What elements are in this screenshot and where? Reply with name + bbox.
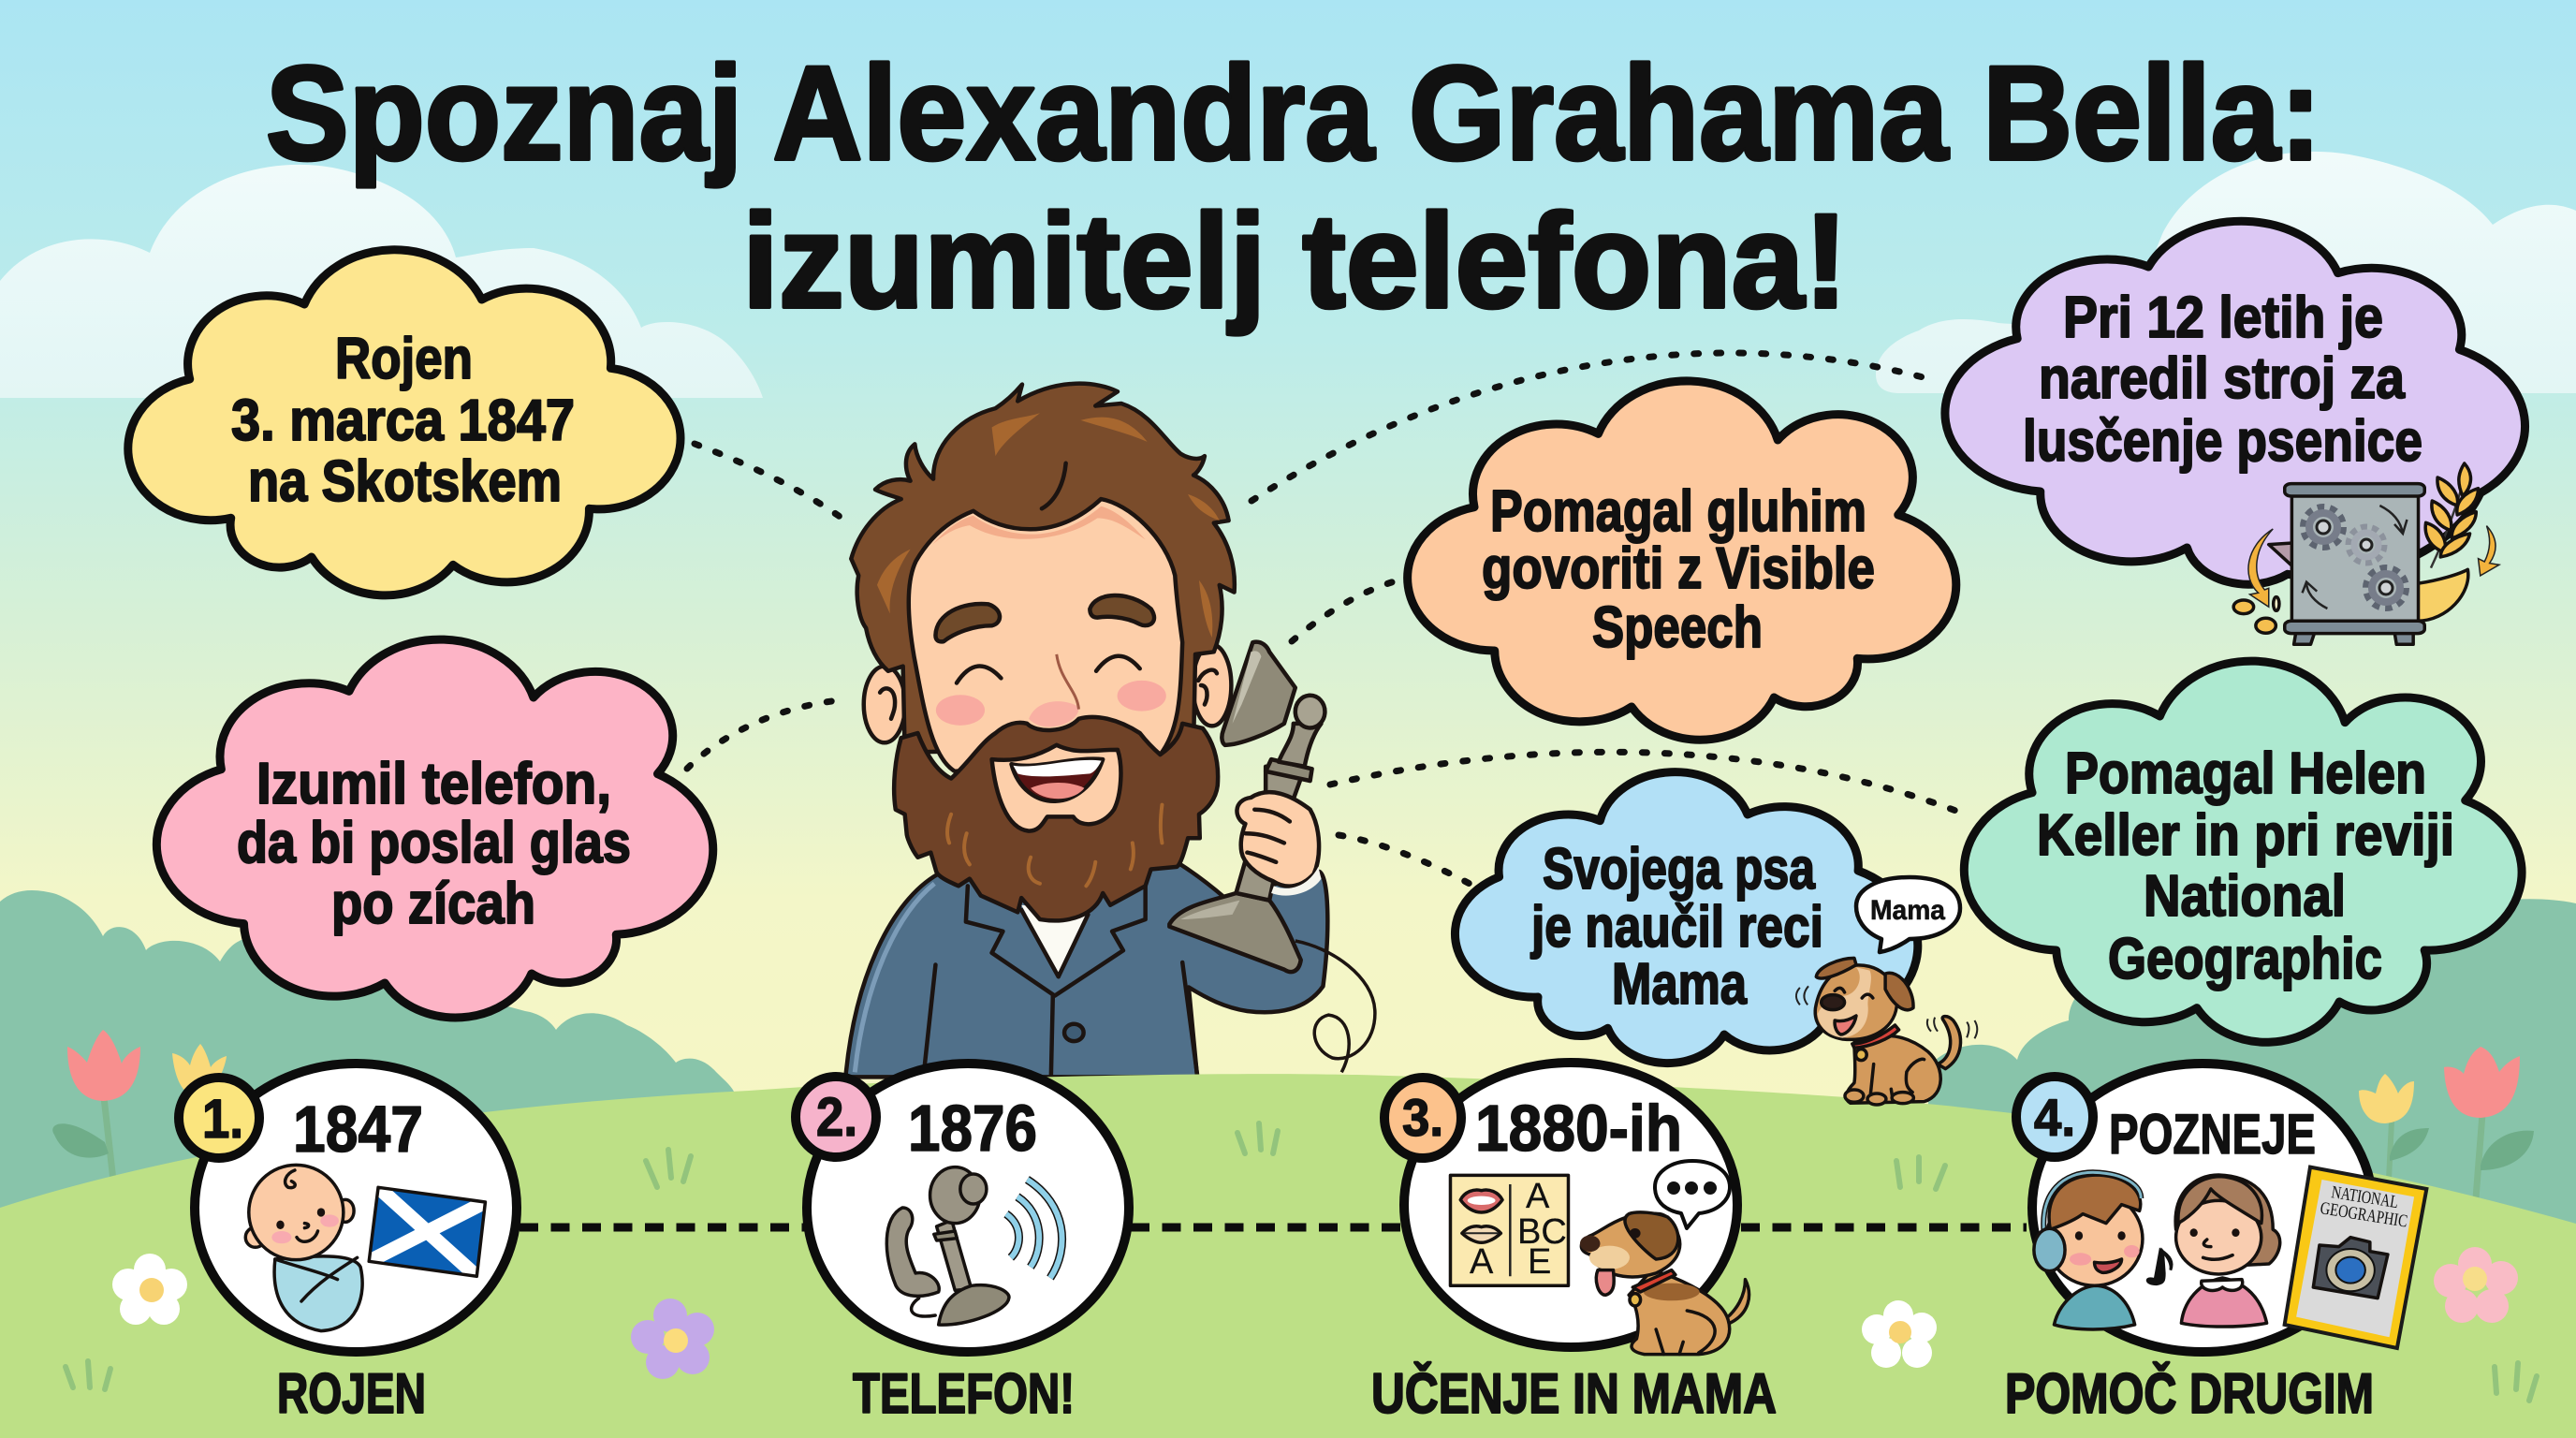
boy head: [2046, 1192, 2143, 1285]
girl face: [2176, 1200, 2261, 1274]
white flower right: [1862, 1300, 1937, 1368]
step labels: TELEFON!: [853, 1362, 1075, 1425]
text: National: [2144, 864, 2346, 929]
machine body: [2291, 494, 2419, 623]
tag: [1630, 1294, 1641, 1306]
open lips: [1460, 1190, 1502, 1212]
text: [237, 752, 631, 936]
body: [1846, 1035, 1940, 1103]
boy cheeks: [2070, 1245, 2140, 1266]
hair: [851, 384, 1235, 752]
year: 1880-ih: [1475, 1092, 1682, 1165]
telephone base highlight: [1180, 901, 1239, 919]
eyes: [276, 1208, 325, 1229]
icon: husking machine and wheat: [2233, 463, 2499, 644]
tongue: [1031, 783, 1084, 799]
tag: [1856, 1049, 1866, 1061]
icon: candlestick telephone with sound waves: [886, 1167, 1062, 1325]
text: Mama: [1612, 952, 1747, 1017]
gold arrows: [2248, 526, 2499, 607]
head: [1815, 965, 1897, 1039]
icon: gears: [2305, 508, 2405, 607]
panel: green cloud, helped others: [1964, 661, 2522, 1042]
step 4: later: [2016, 1064, 2426, 1352]
telephone cord: [1295, 941, 1375, 1072]
panel: orange cloud, Visible Speech: [1408, 381, 1956, 740]
cheeks: [271, 1214, 339, 1243]
speech bubble Mama: Mama: [1870, 895, 1945, 926]
mouth and tongue: [1835, 1016, 1856, 1034]
heading: POZNEJE: [2109, 1103, 2316, 1166]
teeth: [1013, 760, 1102, 776]
music note: [2147, 1250, 2172, 1284]
step labels: POMOČ DRUGIM: [2005, 1362, 2374, 1425]
girl dress: [2181, 1278, 2267, 1327]
step labels: ROJEN: [277, 1362, 426, 1425]
badge 4: [2016, 1077, 2093, 1157]
magazine title: NATIONAL: [2330, 1182, 2400, 1212]
chart card: [1450, 1175, 1568, 1285]
tongue: [1596, 1270, 1614, 1295]
face blaze: [1818, 967, 1871, 1038]
divider: [1509, 1184, 1512, 1276]
magazine title: [2319, 1182, 2408, 1232]
chart letters: A: [1470, 1242, 1494, 1282]
teeth: [1468, 1196, 1496, 1205]
motion marks: [1796, 986, 1977, 1038]
title: Spoznaj Alexandra Grahama Bella:: [266, 39, 2321, 188]
hopper left: [2269, 543, 2292, 566]
eye: [1630, 1228, 1641, 1239]
panel: pink cloud, invented telephone: [156, 639, 713, 1018]
text: Speech: [1592, 595, 1763, 660]
text: [1482, 479, 1875, 660]
panel: purple cloud, wheat machine: [1945, 221, 2525, 644]
year: 1847: [293, 1093, 423, 1166]
grain tray right: [2418, 569, 2468, 621]
year: 1876: [908, 1092, 1037, 1165]
text: 3. marca 1847: [231, 389, 575, 453]
chart letters: [1470, 1177, 1567, 1282]
speech bubble with dots: [1655, 1161, 1730, 1228]
icon: boy with headphones, girl and magazine: [2034, 1167, 2426, 1348]
eyes: [1835, 988, 1873, 998]
mouth: [297, 1224, 317, 1241]
telephone joint: [1295, 696, 1325, 727]
machine top cap: [2285, 484, 2424, 496]
hair strand: [1042, 463, 1066, 508]
machine bottom cap: [2285, 621, 2424, 634]
swaddled body: [274, 1256, 362, 1331]
step labels: [277, 1362, 2374, 1425]
icon: Visible Speech chart: [1450, 1175, 1568, 1285]
background sky: [0, 0, 2576, 1123]
face: [909, 499, 1182, 771]
paws: [1845, 1090, 1913, 1105]
muzzle: [1589, 1246, 1630, 1269]
hand: [1237, 792, 1319, 887]
jacket light edge: [855, 884, 934, 1072]
step labels: UČENJE IN MAMA: [1371, 1362, 1777, 1425]
ground hill: [0, 1074, 2576, 1438]
girl fringe: [2178, 1177, 2261, 1224]
text: Svojega psa: [1543, 837, 1815, 902]
badge 2: 2.: [816, 1087, 857, 1148]
hair fringe shadow: [932, 506, 1146, 545]
nose: [1822, 995, 1845, 1010]
grass tufts: [66, 1123, 2537, 1401]
title: izumitelj telefona!: [742, 187, 1848, 336]
jacket: [845, 864, 1327, 1077]
text: Izumil telefon,: [256, 752, 611, 816]
closed lips: [1462, 1226, 1500, 1242]
ear: [1625, 1212, 1678, 1259]
panel: yellow cloud, born: [128, 250, 681, 595]
stem: [937, 1220, 972, 1290]
text: je naučil reci: [1530, 895, 1823, 960]
character: Alexander Graham Bell with telephone: [845, 384, 1375, 1077]
text: Pomagal Helen: [2065, 741, 2426, 806]
closed smiling eyes: [957, 656, 1140, 682]
timeline dashed line: [520, 1223, 2027, 1232]
badge 4: 4.: [2034, 1088, 2075, 1147]
text: Keller in pri reviji: [2037, 803, 2454, 868]
ears: [1816, 958, 1913, 1010]
magazine: [2285, 1167, 2426, 1348]
machine feet: [2294, 632, 2413, 644]
telephone neck: [1279, 724, 1321, 767]
dotted connector lines: [687, 353, 1970, 885]
spot: [1644, 1284, 1700, 1300]
telephone mouthpiece: [1222, 642, 1295, 745]
telephone stem: [1237, 767, 1301, 901]
hair curl: [285, 1170, 295, 1188]
background hills: [0, 890, 2576, 1236]
badge 3: 3.: [1402, 1088, 1443, 1147]
lapels and buttons: [925, 886, 1197, 1077]
chart letters: A: [1526, 1177, 1550, 1216]
camera body: [2313, 1238, 2388, 1299]
collar: [1632, 1270, 1676, 1292]
step 2: 1876: [796, 1064, 1129, 1352]
title: [266, 39, 2321, 336]
chart letters: E: [1528, 1242, 1551, 1282]
decorative flowers: [112, 1247, 2518, 1379]
magazine title: GEOGRAPHIC: [2319, 1198, 2408, 1232]
boy face: [2075, 1231, 2126, 1240]
badge 3: [1384, 1078, 1461, 1158]
ears: [864, 645, 1231, 742]
head: [249, 1165, 344, 1260]
text: Rojen: [335, 327, 473, 391]
machine arrows: [2303, 506, 2407, 609]
text: da bi poslal glas: [237, 811, 631, 875]
hair highlights: [877, 413, 1220, 638]
right tulips: [2359, 1047, 2534, 1198]
icon: dog with tongue out: [1580, 1212, 1749, 1355]
mouth area: [992, 745, 1120, 831]
tail: [1938, 1017, 1960, 1069]
Scottish flag: [369, 1187, 485, 1276]
cord: [912, 1299, 935, 1316]
mouthpiece: [930, 1167, 987, 1224]
base: [939, 1285, 1009, 1325]
white flower left: [112, 1254, 187, 1325]
headphone cup: [2034, 1228, 2065, 1271]
text: Geographic: [2108, 927, 2382, 991]
boy hair: [2049, 1175, 2141, 1229]
text: lusčenje psenice: [2023, 409, 2422, 474]
legs: [1656, 1311, 1715, 1355]
chart letters: BC: [1517, 1212, 1567, 1252]
girl collar: [2202, 1280, 2243, 1290]
text: po zícah: [331, 872, 535, 936]
sound waves: [1006, 1180, 1062, 1278]
text: [1530, 837, 1823, 1017]
boy mouth: [2095, 1259, 2122, 1272]
text: [231, 327, 575, 514]
pink flower: [2434, 1247, 2518, 1323]
shirt cuff: [1271, 867, 1321, 896]
tail: [1722, 1280, 1749, 1323]
text: [2037, 741, 2454, 991]
speech bubble Mama: [1856, 877, 1960, 952]
badge 2: [796, 1077, 876, 1157]
step 3: 1880s: [1384, 1063, 1749, 1355]
headphones band: [2043, 1172, 2141, 1233]
text: govoriti z Visible: [1482, 536, 1875, 601]
icon: baby and Scottish flag: [245, 1165, 485, 1331]
boy shirt: [2054, 1285, 2135, 1329]
text: [2023, 286, 2422, 474]
collar: [1852, 1025, 1899, 1048]
open mouth: [1012, 759, 1103, 801]
body: [1629, 1270, 1730, 1355]
loose grains: [2233, 597, 2279, 633]
icon: happy dog: [1796, 958, 1977, 1105]
text: naredil stroj za: [2039, 346, 2405, 411]
shirt: [1021, 905, 1090, 976]
receiver: [886, 1208, 939, 1296]
purple flower: [631, 1299, 714, 1379]
wheat grains: [2425, 463, 2479, 557]
eyebrows: [935, 595, 1154, 641]
background clouds: [0, 152, 2576, 398]
girl smile: [2203, 1240, 2232, 1259]
wheat stem: [2431, 480, 2464, 568]
telephone base: [1169, 893, 1301, 972]
left tulips: [52, 1030, 227, 1189]
telephone collar: [1266, 759, 1312, 781]
fingers: [1245, 810, 1290, 862]
mouthpiece highlight: [1233, 651, 1261, 724]
swaddle folds: [275, 1257, 358, 1301]
step 1: 1847: [179, 1064, 517, 1352]
ear details: [880, 670, 1217, 719]
beard: [894, 717, 1218, 920]
nose: [1580, 1236, 1600, 1252]
girl features: [2190, 1228, 2240, 1237]
head: [1581, 1213, 1680, 1277]
text: Pri 12 letih je: [2063, 286, 2383, 350]
badge 1: 1.: [202, 1089, 243, 1150]
text: Pomagal gluhim: [1490, 479, 1866, 544]
camera lens: [2326, 1249, 2375, 1291]
beard highlights: [947, 805, 1162, 886]
text: na Skotskem: [248, 449, 562, 514]
panel: blue cloud, taught dog: [1455, 772, 1977, 1105]
girl hair back: [2175, 1175, 2280, 1267]
leg lines: [1870, 1059, 1925, 1102]
magazine cover: [2296, 1180, 2414, 1337]
ears: [245, 1199, 354, 1247]
stem band: [934, 1231, 957, 1240]
nose: [1029, 701, 1079, 726]
badge 1: [179, 1078, 259, 1158]
cheeks: [936, 681, 1166, 726]
